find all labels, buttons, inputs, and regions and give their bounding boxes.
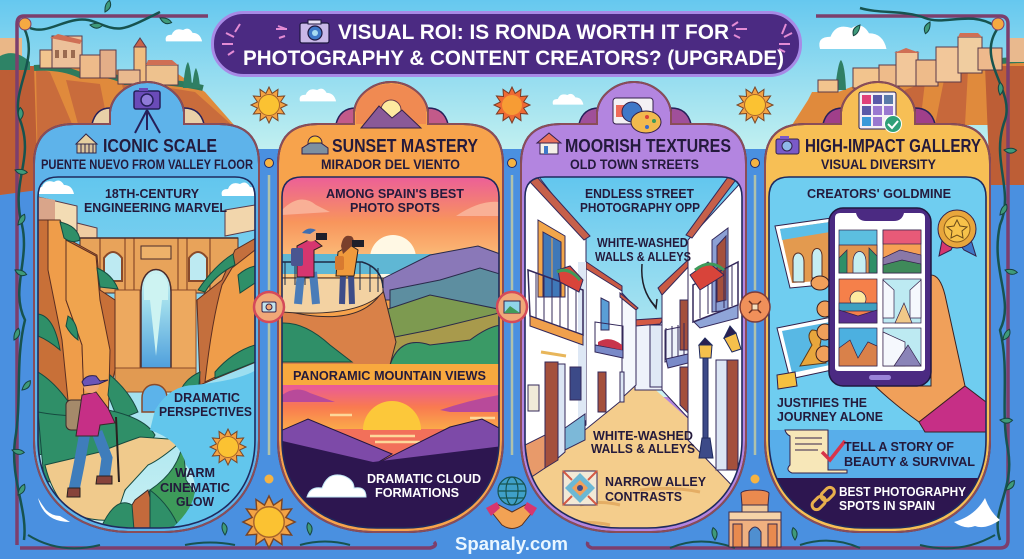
decorative vine frame: right <box>588 8 1017 548</box>
caption: warm cinematic glow: WARM <box>175 465 215 480</box>
caption: justifies the journey alone <box>777 395 883 424</box>
lower banner <box>278 364 503 385</box>
panel 3 subheading: OLD TOWN STREETS <box>570 157 699 172</box>
icon: handshake <box>486 502 537 528</box>
panel 1 heading: ICONIC SCALE <box>103 136 217 156</box>
caption: creators' goldmine: CREATORS' GOLDMINE <box>807 186 951 201</box>
panel 1 top caption: 18TH-CENTURY <box>105 186 199 201</box>
bridge <box>80 238 238 412</box>
caption: justifies the journey alone: JOURNEY ALONE <box>777 409 883 424</box>
caption: dramatic cloud formations: DRAMATIC CLOUD <box>367 471 481 486</box>
panel 2 heading: SUNSET MASTERY <box>332 136 478 156</box>
panel 4 heading: HIGH-IMPACT GALLERY <box>805 136 981 156</box>
phone <box>829 208 931 386</box>
panel 1 arch and header <box>34 82 259 532</box>
caption: warm cinematic glow: GLOW <box>176 494 215 509</box>
icon: chain link <box>810 486 836 511</box>
icon: photo grid with check <box>859 92 902 132</box>
path <box>45 437 183 520</box>
panel 3 arch and header <box>579 108 691 124</box>
icon: camera and palette <box>613 98 661 133</box>
far buildings <box>634 318 662 390</box>
caption: white-washed walls lower: WALLS & ALLEYS <box>591 441 695 456</box>
greenery <box>38 222 255 505</box>
caption: white-washed walls upper: WHITE-WASHED <box>597 236 688 250</box>
panel 2: sunset mastery <box>278 82 503 540</box>
panel 1 top caption <box>84 186 227 215</box>
clouds in sky <box>166 25 886 105</box>
panel 1 top caption: ENGINEERING MARVEL <box>84 200 227 215</box>
panel 2 illustration: viewpoint at sunset <box>278 177 503 540</box>
caption: best photography spots <box>839 484 966 513</box>
caption: narrow alley contrasts: NARROW ALLEY <box>605 474 706 489</box>
ground <box>533 387 730 528</box>
icon: arch sunset <box>356 84 426 128</box>
panel 2 subheading: MIRADOR DEL VIENTO <box>321 157 460 172</box>
phone thumbnails <box>839 230 921 366</box>
caption: among spain's best <box>326 186 464 215</box>
middle buildings left <box>585 261 638 430</box>
street lamps <box>699 326 741 458</box>
buildings on cliff edges <box>38 197 255 240</box>
caption: endless street photography opp <box>580 186 700 215</box>
decorative vine frame: left <box>10 0 435 548</box>
right cliff and hill town <box>792 33 1024 185</box>
caption: white-washed walls upper: WALLS & ALLEYS <box>595 250 691 264</box>
cloud icon <box>307 475 366 497</box>
caption: narrow alley contrasts <box>605 474 706 504</box>
rocky outcrop <box>282 290 396 365</box>
suns between panels <box>243 87 773 548</box>
panel 3 heading: MOORISH TEXTURES <box>565 136 731 156</box>
icon: temple <box>76 134 97 153</box>
left big building <box>521 177 590 478</box>
medallion: network <box>740 292 770 322</box>
caption: best photography spots: SPOTS IN SPAIN <box>839 498 935 513</box>
icon: callout sun <box>210 429 246 465</box>
title text: PHOTOGRAPHY & CONTENT CREATORS? (UPGRADE) <box>243 47 784 70</box>
caption: dramatic cloud formations: FORMATIONS <box>375 485 459 500</box>
panel 4 illustration: gallery on phone <box>765 177 990 538</box>
caption: tell a story: TELL A STORY OF <box>844 439 954 454</box>
title text <box>243 21 784 70</box>
caption: dramatic perspectives <box>159 390 252 419</box>
white clouds bottom corners <box>38 498 1000 527</box>
hiker <box>66 376 119 497</box>
caption: dramatic perspectives: DRAMATIC <box>174 390 241 405</box>
caption: tell a story: BEAUTY & SURVIVAL <box>844 454 975 469</box>
footer brand: Spanaly.com <box>455 534 568 554</box>
icon: house <box>537 133 561 154</box>
panel 1: iconic scale <box>34 82 260 537</box>
caption: panoramic mountain views: PANORAMIC MOUNTAIN VIEWS <box>293 368 486 383</box>
scroll icon <box>785 430 847 473</box>
caption: endless street photography opp: PHOTOGRAPHY OPP <box>580 200 700 215</box>
caption: narrow alley contrasts: CONTRASTS <box>605 489 682 504</box>
caption: among spain's best: AMONG SPAIN'S BEST <box>326 186 464 201</box>
caption: best photography spots: BEST PHOTOGRAPHY <box>839 484 966 499</box>
caption: dramatic perspectives: PERSPECTIVES <box>159 404 252 419</box>
panel 3 illustration: white-washed alley <box>521 177 746 540</box>
icon: camera on tripod <box>134 88 160 133</box>
tile <box>563 471 597 505</box>
callout: dramatic perspectives blue area <box>150 370 256 530</box>
bottom-left photo <box>777 317 832 379</box>
caption: dramatic cloud formations <box>367 471 481 500</box>
caption: justifies the journey alone: JUSTIFIES THE <box>777 395 867 410</box>
caption: warm cinematic glow <box>160 465 231 509</box>
medallion: camera <box>254 292 284 322</box>
icon: domed building <box>729 490 781 547</box>
right cliff <box>197 238 256 385</box>
panel 4: high-impact gallery <box>765 82 990 538</box>
panel 4 arch and header <box>823 108 935 124</box>
caption: tell a story <box>844 439 975 469</box>
medallion: landscape <box>497 292 527 322</box>
separators and dots between panels <box>264 158 760 484</box>
icon: small sunset <box>302 136 328 154</box>
title banner <box>212 12 800 76</box>
caption: white-washed walls upper <box>595 236 691 264</box>
left cliff <box>38 220 116 409</box>
icon: camera in heading <box>776 136 799 154</box>
left cliff and hill town <box>0 34 234 200</box>
panel 2 arch and header <box>336 108 448 124</box>
icon: globe <box>498 477 526 505</box>
title text: VISUAL ROI: IS RONDA WORTH IT FOR <box>338 21 729 44</box>
photographers <box>291 228 364 304</box>
lower sunset <box>282 385 498 422</box>
caption: among spain's best: PHOTO SPOTS <box>350 200 440 215</box>
panel 1 illustration: bridge in gorge <box>34 177 260 537</box>
caption: white-washed walls lower <box>591 428 695 456</box>
award medal <box>938 210 976 256</box>
caption: white-washed walls lower: WHITE-WASHED <box>593 428 693 443</box>
arrow <box>642 264 655 306</box>
icon: camera in title <box>300 20 329 43</box>
panel 3: moorish textures <box>521 82 746 540</box>
panel 4 subheading: VISUAL DIVERSITY <box>821 157 936 172</box>
caption: endless street photography opp: ENDLESS STREET <box>585 186 694 201</box>
caption: warm cinematic glow: CINEMATIC <box>160 480 231 495</box>
panel 1 subheading: PUENTE NUEVO FROM VALLEY FLOOR <box>41 157 253 172</box>
right buildings <box>658 177 746 500</box>
hand <box>875 275 965 422</box>
mountain layers <box>380 246 503 365</box>
